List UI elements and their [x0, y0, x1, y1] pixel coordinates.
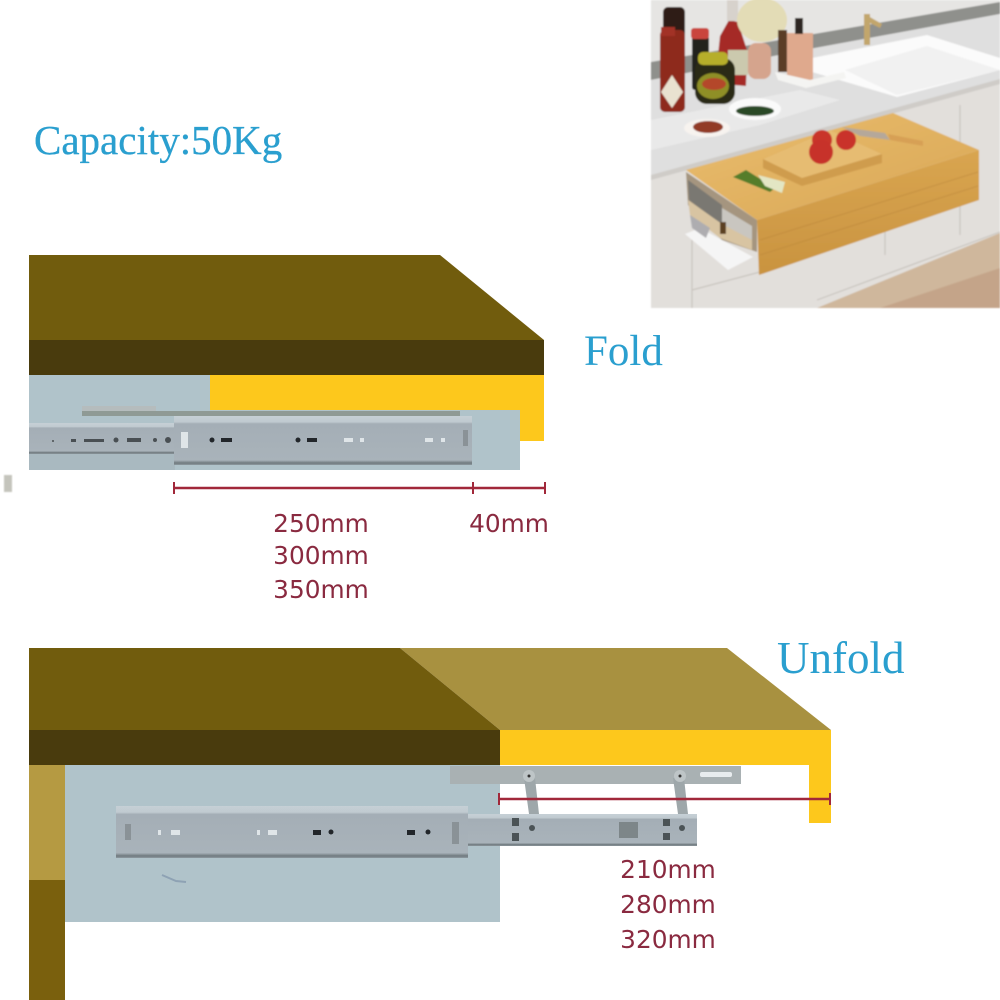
small smudge on panel: [162, 875, 186, 882]
cabinet side post: [29, 765, 65, 880]
label: fold length options: 350mm: [273, 575, 369, 604]
heading: fold: Fold: [584, 328, 663, 375]
heading: unfold: Unfold: [777, 633, 904, 683]
label: unfold length options: [620, 855, 716, 954]
wooden board body: [757, 150, 979, 275]
folded white shelf: [685, 228, 753, 270]
dimension line: fold: [174, 482, 545, 494]
cabinet panel: [65, 765, 500, 922]
label: fold length options: [273, 509, 369, 604]
cabinet panel: [29, 375, 520, 470]
extended inner rail: [462, 814, 697, 846]
extended board top: [400, 648, 831, 730]
soap dispenser: [775, 18, 846, 88]
cabinet doors: [692, 105, 1000, 308]
board top, fixed: [29, 648, 500, 730]
knife: [842, 127, 923, 146]
label: 40mm: 40mm: [469, 509, 549, 538]
upper bracket: [82, 406, 156, 414]
yellow board lip: [210, 375, 544, 441]
diagram: fold: [4, 255, 544, 492]
spring onion: [733, 170, 785, 193]
outer rail: [174, 416, 472, 465]
open drawer side: [686, 172, 757, 252]
label: unfold length options: 210mm: [620, 855, 716, 884]
inner rail: [29, 423, 175, 470]
hinge plate: [450, 766, 741, 814]
flowers and vase: [737, 0, 787, 79]
outer rail: [116, 806, 468, 858]
small fragment at left edge: [4, 475, 12, 492]
label: fold length options: 300mm: [273, 541, 369, 570]
cutting board: [763, 130, 882, 186]
label: unfold length options: 320mm: [620, 925, 716, 954]
board top, folded: [29, 255, 544, 340]
tomatoes: [809, 130, 856, 164]
yellow board lip: [500, 730, 831, 823]
board front edge: [29, 340, 544, 375]
photo: bamboo cutting board drawer on kitchen counter: [651, 0, 1000, 308]
heading: capacity: Capacity:50Kg: [34, 117, 282, 163]
board front edge: [29, 730, 500, 765]
label: unfold length options: 280mm: [620, 890, 716, 919]
label: fold length options: 250mm: [273, 509, 369, 538]
plates: [684, 98, 781, 137]
condiment bottles: [660, 0, 748, 112]
diagram: unfold: [29, 648, 831, 1000]
dimension line: unfold: [499, 793, 831, 805]
